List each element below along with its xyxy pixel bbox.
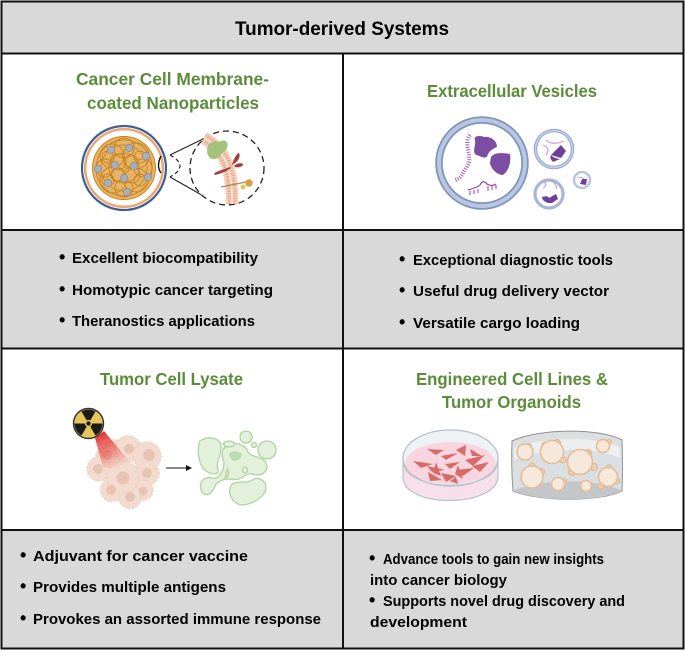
bullet list: • bbox=[399, 312, 405, 332]
heading: engineered cell lines and tumor organoids bbox=[416, 369, 608, 412]
icon: petri dish with cells bbox=[403, 430, 498, 500]
bullet list: Provides multiple antigens bbox=[33, 580, 226, 596]
bullet list: Adjuvant for cancer vaccine bbox=[33, 549, 248, 565]
bullet list: Advance tools to gain new insights bbox=[383, 552, 604, 568]
panel: extracellular vesicle benefits bbox=[343, 230, 684, 348]
bullet list: Theranostics applications bbox=[72, 314, 255, 330]
bullet list: • bbox=[399, 249, 405, 269]
heading: cancer cell membrane-coated nanoparticles bbox=[76, 69, 269, 113]
icon: irradiated tumor cells becoming lysate bbox=[74, 408, 276, 508]
panel: engineered models benefits bbox=[343, 530, 684, 648]
bullet list bbox=[59, 247, 273, 330]
bullet list: • bbox=[59, 247, 65, 267]
panel: cancer cell membrane-coated nanoparticles bbox=[76, 69, 269, 210]
bullet list: • bbox=[369, 590, 375, 610]
heading: cancer cell membrane-coated nanoparticles: Cancer Cell Membrane- bbox=[76, 69, 269, 89]
bullet list: into cancer biology bbox=[370, 573, 507, 589]
arrow bbox=[166, 465, 192, 471]
icon: coated nanoparticle with zoomed membrane bbox=[82, 126, 264, 210]
heading: engineered cell lines and tumor organoids: Engineered Cell Lines & bbox=[416, 369, 608, 389]
heading: extracellular vesicles: Extracellular Vesicles bbox=[427, 81, 597, 101]
panel: cancer cell membrane benefits bbox=[2, 230, 342, 348]
panel: engineered cell lines and tumor organoids bbox=[403, 369, 622, 500]
bullet list: Versatile cargo loading bbox=[413, 316, 580, 332]
bullet list bbox=[399, 249, 613, 332]
icon: vesicles with cargo bbox=[439, 120, 590, 208]
bullet list: Homotypic cancer targeting bbox=[72, 283, 273, 299]
title: Tumor-derived Systems bbox=[235, 18, 449, 40]
bullet list: Supports novel drug discovery and bbox=[383, 594, 625, 610]
bullet list: Useful drug delivery vector bbox=[413, 284, 609, 300]
bullet list: • bbox=[399, 280, 405, 300]
bullet list: • bbox=[20, 545, 26, 565]
bullet list bbox=[20, 545, 321, 628]
icon: tumor organoids in gel bbox=[512, 431, 622, 499]
bullet list: • bbox=[20, 576, 26, 596]
bullet list: Provokes an assorted immune response bbox=[33, 612, 321, 628]
panel: extracellular vesicles bbox=[427, 81, 597, 208]
title bbox=[2, 2, 684, 54]
bullet list: development bbox=[370, 615, 467, 631]
bullet list: • bbox=[59, 279, 65, 299]
bullet list: • bbox=[59, 310, 65, 330]
heading: tumor cell lysate: Tumor Cell Lysate bbox=[100, 369, 243, 389]
bullet list: Exceptional diagnostic tools bbox=[413, 253, 613, 269]
panel: tumor cell lysate bbox=[74, 369, 276, 508]
bullet list: • bbox=[20, 608, 26, 628]
panel: tumor cell lysate benefits bbox=[2, 530, 342, 648]
bullet list bbox=[369, 548, 625, 631]
bullet list: Excellent biocompatibility bbox=[72, 251, 258, 267]
bullet list: • bbox=[369, 548, 375, 568]
heading: cancer cell membrane-coated nanoparticles: coated Nanoparticles bbox=[87, 93, 259, 113]
heading: engineered cell lines and tumor organoids: Tumor Organoids bbox=[442, 392, 581, 412]
